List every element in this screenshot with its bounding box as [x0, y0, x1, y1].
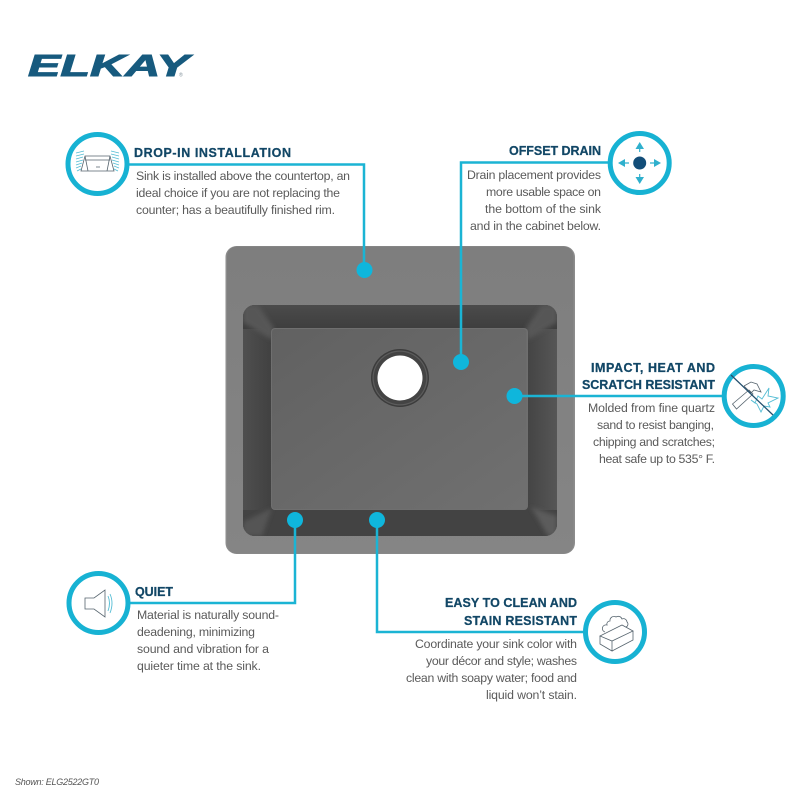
heading: STAIN RESISTANT [464, 614, 577, 628]
body text [137, 608, 279, 673]
body text: counter; has a beautifully finished rim. [136, 203, 335, 217]
marker dot [453, 354, 469, 370]
marker dot [287, 512, 303, 528]
heading: QUIET [135, 585, 173, 599]
body text: Material is naturally sound- [137, 608, 279, 622]
heading: SCRATCH RESISTANT [582, 378, 715, 392]
marker dot [369, 512, 385, 528]
heading [582, 361, 715, 392]
body text: Sink is installed above the countertop, an [136, 169, 350, 183]
callout: easy to clean and stain resistant [369, 512, 644, 702]
callout: drop-in installation [68, 134, 372, 278]
body text: clean with soapy water; food and [406, 671, 577, 685]
leader line [128, 520, 295, 603]
icon: drain with arrows [610, 134, 669, 192]
icon: drop-in sink [68, 134, 127, 194]
body text [136, 169, 350, 217]
sink deck [226, 246, 575, 554]
icon: speaker [69, 574, 128, 632]
callout: quiet [69, 512, 303, 673]
body text: your décor and style; washes [426, 654, 577, 668]
heading: DROP-IN INSTALLATION [134, 146, 291, 160]
footnote: model shown: Shown: ELG2522GT0 [15, 777, 99, 787]
marker dot [506, 388, 522, 404]
sink basin floor [271, 328, 528, 510]
heading: IMPACT, HEAT AND [591, 361, 715, 375]
body text: and in the cabinet below. [470, 219, 601, 233]
callout: offset drain [453, 134, 669, 370]
sink product image [226, 246, 575, 554]
icon: soap bar [586, 602, 644, 662]
icon: hammer crossed out [724, 366, 783, 426]
body text: Molded from fine quartz [588, 401, 715, 415]
leader line [461, 162, 610, 362]
body text [467, 168, 602, 233]
leader line [377, 520, 590, 632]
body text [588, 401, 715, 466]
logo: Elkay: ® [179, 72, 183, 78]
sink basin walls [243, 305, 557, 536]
heading [445, 596, 577, 628]
logo: Elkay [28, 48, 194, 83]
body text [406, 637, 577, 702]
marker dot [356, 262, 372, 278]
heading: OFFSET DRAIN [509, 144, 601, 158]
body text: Coordinate your sink color with [415, 637, 577, 651]
body text: deadening, minimizing [137, 625, 255, 639]
body text: sand to resist banging, [597, 418, 714, 432]
leader line [514, 395, 725, 397]
body text: liquid won’t stain. [486, 688, 577, 702]
body text: chipping and scratches; [593, 435, 715, 449]
logo: Elkay: ELKAY [28, 48, 194, 83]
body text: the bottom of the sink [485, 202, 602, 216]
body text: sound and vibration for a [137, 642, 269, 656]
callout: impact, heat and scratch resistant [506, 361, 783, 466]
body text: ideal choice if you are not replacing the [136, 186, 340, 200]
body text: Drain placement provides [467, 168, 601, 182]
heading: EASY TO CLEAN AND [445, 596, 577, 610]
body text: heat safe up to 535° F. [599, 452, 715, 466]
body text: quieter time at the sink. [137, 659, 261, 673]
sink drain [371, 349, 429, 407]
body text: more usable space on [486, 185, 601, 199]
leader line [128, 164, 364, 270]
